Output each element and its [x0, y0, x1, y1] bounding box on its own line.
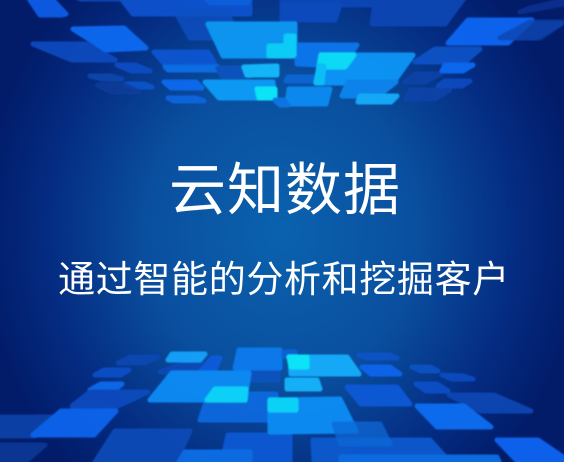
subtitle: 通过智能的分析和挖掘客户 — [58, 259, 510, 300]
top light panels — [28, 0, 564, 105]
bottom light panels — [0, 350, 564, 462]
title: 云知数据 — [169, 158, 401, 222]
